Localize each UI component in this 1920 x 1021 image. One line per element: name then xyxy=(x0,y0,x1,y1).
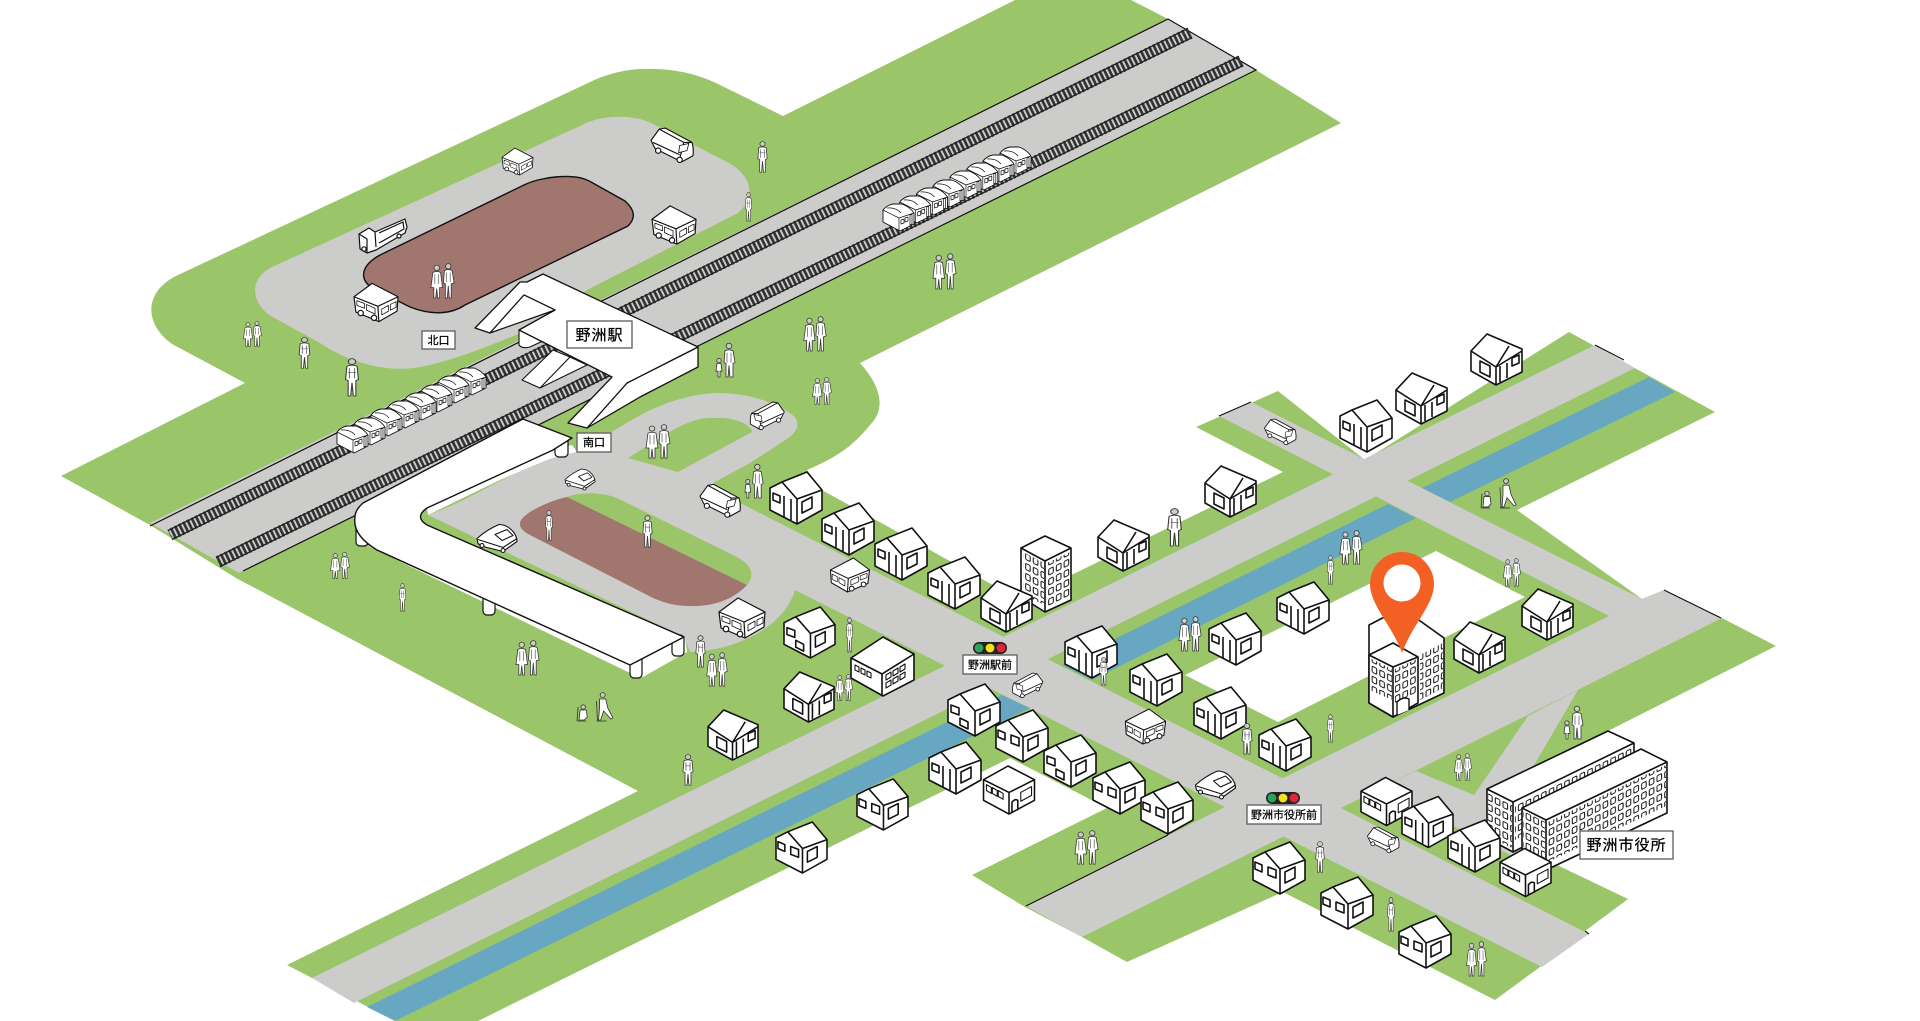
people xyxy=(516,641,539,675)
house southeast 2 xyxy=(1321,877,1373,929)
person xyxy=(299,338,310,368)
city hall label xyxy=(1580,831,1673,859)
person group xyxy=(696,636,727,686)
house central 1 xyxy=(1194,687,1246,739)
station name label xyxy=(567,321,632,348)
person xyxy=(1100,658,1107,685)
person xyxy=(346,359,358,396)
vehicle: van junction xyxy=(1013,673,1043,698)
house city hall 4 xyxy=(1500,848,1551,897)
people: couple on north plaza xyxy=(431,264,454,298)
train north track xyxy=(883,147,1031,231)
city hall label: 野洲市役所 xyxy=(1586,837,1667,854)
person xyxy=(745,193,752,221)
south exit label: 南口 xyxy=(583,436,605,449)
house north 3 xyxy=(1471,334,1522,385)
south elevated deck xyxy=(355,419,684,665)
city hall front block xyxy=(1522,749,1667,870)
vehicle: van on main road xyxy=(700,484,740,517)
people xyxy=(1179,617,1201,651)
house southeast 3 xyxy=(1399,916,1451,968)
location pin xyxy=(1370,552,1434,653)
white block around destination xyxy=(1185,551,1525,722)
river: west section xyxy=(367,695,1030,1021)
vehicle: truck xyxy=(359,219,407,253)
house north central xyxy=(1098,520,1149,571)
scooter riders xyxy=(1481,479,1516,508)
house central 6 xyxy=(1277,582,1329,634)
label: city hall front: 野洲市役所前 xyxy=(1251,808,1317,822)
vehicle: van on loop xyxy=(750,402,784,430)
person xyxy=(846,618,853,652)
house central 3 xyxy=(1065,626,1117,678)
vehicle: bus north plaza west xyxy=(354,283,398,322)
north station plaza xyxy=(255,117,750,369)
house north 4 xyxy=(1205,466,1256,517)
house north 1 xyxy=(1340,400,1392,452)
south plaza green island xyxy=(567,493,751,585)
house southeast 1 xyxy=(1253,842,1305,894)
vehicle: bus north plaza east xyxy=(652,206,696,244)
person xyxy=(1168,509,1181,546)
railway embankment xyxy=(150,19,1256,573)
house south 2 xyxy=(948,684,1000,736)
road: main NW-SE xyxy=(740,503,1589,967)
adult and child xyxy=(745,464,763,498)
river: east section xyxy=(1422,377,1675,502)
north plaza bus rotary xyxy=(364,176,633,313)
road: upper NW-SE xyxy=(1219,402,1642,616)
people xyxy=(813,378,831,404)
person xyxy=(1316,842,1324,872)
person xyxy=(1387,898,1395,931)
label: city hall front xyxy=(1247,805,1321,824)
road: branch to city hall xyxy=(1474,690,1578,795)
house central 2 xyxy=(1259,719,1311,771)
south deck shadow xyxy=(360,445,687,677)
destination building xyxy=(1369,608,1444,717)
road: long NE-SW xyxy=(312,345,1635,1003)
house row 4 xyxy=(928,557,980,609)
house south 4 xyxy=(1044,735,1096,787)
person xyxy=(643,516,652,547)
house river 1 xyxy=(776,822,827,873)
person xyxy=(1327,715,1334,742)
person xyxy=(399,584,406,611)
house row 5 xyxy=(981,581,1032,632)
label: station front xyxy=(963,655,1017,674)
person xyxy=(1327,556,1334,584)
people xyxy=(1454,754,1472,780)
people xyxy=(1467,942,1486,976)
house row 2 xyxy=(822,503,874,555)
south plaza road loop xyxy=(428,393,798,652)
person xyxy=(545,511,553,540)
house south 1 xyxy=(929,742,981,794)
vehicle: van road xyxy=(830,558,870,592)
people xyxy=(1503,559,1521,586)
people xyxy=(244,321,262,346)
adult and child xyxy=(1564,706,1583,739)
people xyxy=(331,552,349,578)
station side face xyxy=(587,347,698,428)
track 2 xyxy=(216,56,1243,566)
house river 2 xyxy=(857,779,908,830)
block building west xyxy=(851,637,914,696)
house west 2 xyxy=(784,672,834,722)
adult and child xyxy=(716,343,735,377)
road end lines xyxy=(1026,345,1721,934)
small block south xyxy=(984,766,1034,814)
house city hall 1 xyxy=(1361,777,1412,826)
road: city hall access xyxy=(1341,767,1533,860)
house south 5 xyxy=(1093,762,1145,814)
people xyxy=(646,425,670,458)
track 1 xyxy=(168,28,1192,540)
person xyxy=(1242,724,1252,754)
house row 3 xyxy=(875,528,927,580)
vehicle: van city hall xyxy=(1367,827,1399,853)
house east 1 xyxy=(1454,622,1505,673)
station concourse xyxy=(475,274,698,428)
station north stair wedge xyxy=(490,295,555,333)
vehicle: van north east xyxy=(651,128,693,162)
loop road island xyxy=(628,418,752,472)
house south 3 xyxy=(996,710,1048,762)
train south track xyxy=(337,368,486,453)
south plaza brown rotary xyxy=(520,497,747,606)
children xyxy=(835,674,853,700)
people xyxy=(1075,831,1098,864)
south deck legs xyxy=(356,438,684,678)
house city hall 3 xyxy=(1448,820,1500,872)
river: central section xyxy=(1062,504,1416,680)
station lower wedge xyxy=(522,350,587,388)
house east 2 xyxy=(1522,589,1573,640)
traffic light: city hall front xyxy=(1266,792,1300,804)
vehicle: bus south plaza xyxy=(719,598,765,638)
label: station front: 野洲駅前 xyxy=(968,658,1012,672)
vehicle: car under deck xyxy=(477,524,517,552)
house row 1 xyxy=(770,472,822,524)
people xyxy=(804,317,826,351)
south exit label xyxy=(577,433,611,452)
vehicle: car central xyxy=(1196,771,1236,799)
traffic light: station front xyxy=(973,642,1007,654)
scooter riders xyxy=(577,693,613,721)
road: lower NE-SW xyxy=(1026,590,1722,937)
vehicle: car south plaza xyxy=(565,469,595,490)
city hall rear block xyxy=(1487,731,1634,852)
north exit label: 北口 xyxy=(428,334,450,347)
house city hall 2 xyxy=(1402,796,1453,848)
station side leg xyxy=(519,330,545,348)
house north 2 xyxy=(1396,373,1447,424)
apartment tower xyxy=(1021,536,1071,612)
house central 4 xyxy=(1130,654,1182,706)
house west 1 xyxy=(784,607,835,658)
house central 5 xyxy=(1209,613,1261,665)
house west 3 xyxy=(708,710,758,760)
people xyxy=(933,254,956,289)
vehicle: van north road xyxy=(1264,419,1296,445)
vehicle: small van north xyxy=(502,148,533,175)
person xyxy=(758,142,767,172)
station name label: 野洲駅 xyxy=(575,327,624,344)
house south 6 xyxy=(1141,782,1193,834)
people xyxy=(1340,531,1362,564)
north exit label xyxy=(422,331,455,349)
person xyxy=(683,755,693,785)
vehicle: bus central xyxy=(1125,709,1166,744)
